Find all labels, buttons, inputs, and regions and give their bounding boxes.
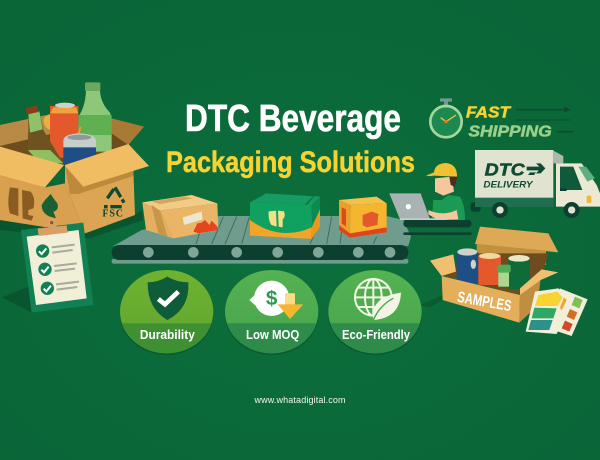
rollers: [143, 247, 395, 258]
speed arrows: [516, 107, 573, 132]
clipboard checklist: [2, 219, 93, 313]
feature badges: [120, 270, 422, 355]
brown bottle: [25, 105, 63, 163]
fast shipping badge: FAST: [466, 105, 511, 122]
checklist item: [36, 244, 75, 258]
badge: low moq: $: [266, 287, 278, 310]
orange can: [43, 103, 78, 158]
checklist item: [38, 263, 77, 276]
orange box: [339, 197, 387, 238]
badge: durability: Durability: [140, 327, 195, 342]
icon: stopwatch: [430, 98, 462, 137]
icon: FSC recycling logo: [102, 187, 124, 220]
badge: low moq: [225, 270, 318, 355]
green box: [250, 193, 320, 239]
samples box: SAMPLES: [456, 289, 513, 315]
title: [166, 98, 415, 179]
icon: FSC recycling logo: FSC: [102, 209, 123, 220]
badge: low moq: Low MOQ: [246, 327, 299, 342]
truck lettering: [483, 160, 545, 189]
icon: fragile marks: [8, 187, 34, 221]
kraft box: [142, 195, 218, 238]
badge: durability: [120, 270, 213, 355]
green bottle: [78, 82, 112, 152]
delivery truck: [471, 150, 600, 218]
website footer: www.whatadigital.com: [254, 395, 346, 405]
samples box: [420, 227, 588, 336]
title: DTC Beverage: [185, 98, 401, 140]
blue can: [63, 127, 96, 165]
badge: eco-friendly: [328, 270, 422, 355]
title: Packaging Solutions: [166, 146, 415, 179]
fast shipping badge: [430, 98, 573, 141]
sample cans: [457, 248, 530, 289]
badge: eco-friendly: Eco-Friendly: [342, 327, 410, 342]
truck lettering: DTC: [485, 160, 526, 180]
truck lettering: DELIVERY: [483, 179, 533, 189]
checklist item: [41, 282, 79, 295]
icon: leaf: [42, 194, 58, 218]
conveyor belt: [112, 193, 411, 264]
laptop: [389, 193, 447, 220]
fast shipping badge: SHIPPING: [468, 124, 552, 141]
worker at laptop: [389, 163, 472, 235]
open cardboard box with beverages: [0, 82, 149, 238]
color swatch cards: [526, 288, 588, 336]
